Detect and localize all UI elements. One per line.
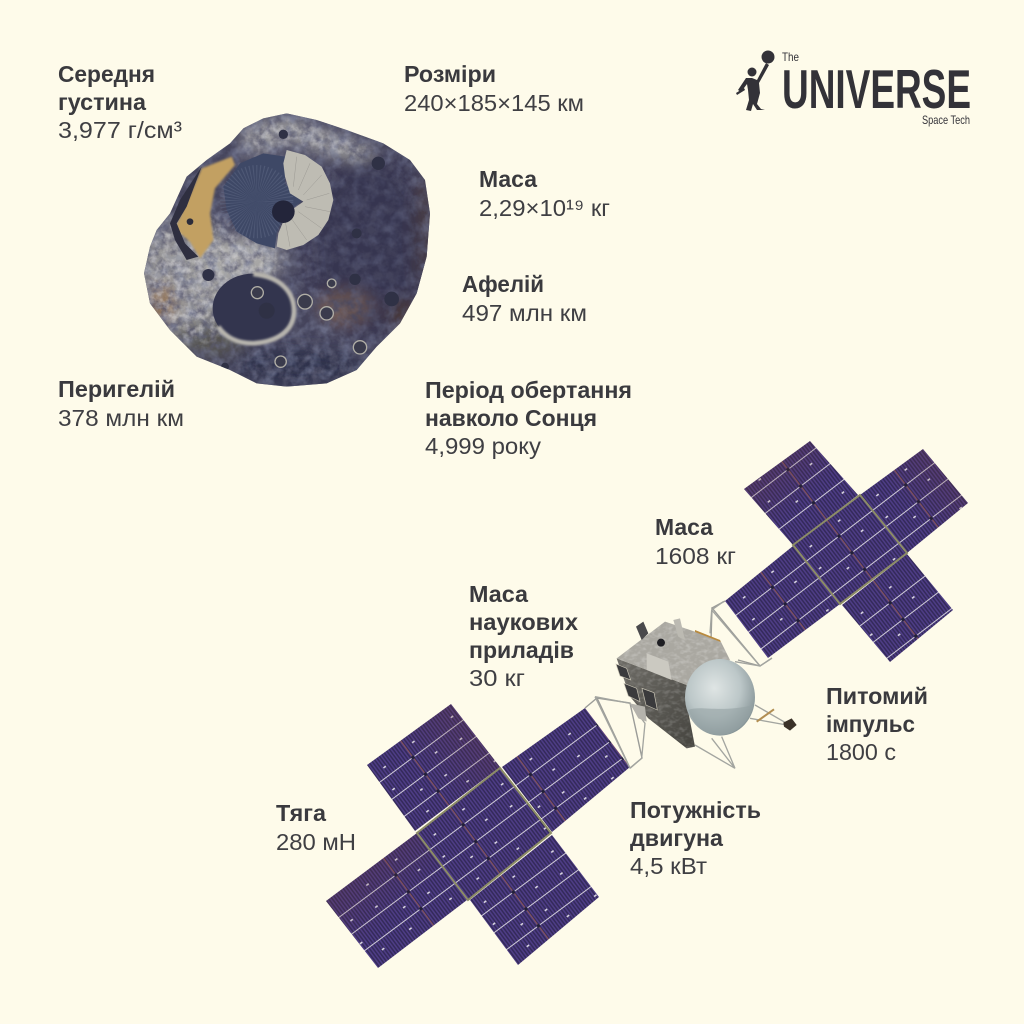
body top	[617, 622, 730, 685]
stat: instrument mass	[469, 581, 578, 691]
struts	[595, 602, 787, 768]
stat: orbital period: 4,999 року	[425, 433, 542, 459]
stat: perihelion	[58, 376, 184, 431]
stat: spacecraft mass: 1608 кг	[655, 543, 736, 569]
support frame	[711, 601, 772, 666]
stat: instrument mass: наукових	[469, 609, 578, 635]
asteroid Psyche illustration	[144, 113, 430, 387]
stat: specific impulse: Питомий	[826, 683, 928, 709]
support frame	[585, 698, 642, 768]
stat: instrument mass: Маса	[469, 581, 528, 607]
stat: specific impulse: 1800 с	[826, 739, 896, 765]
stat: thrust: 280 мН	[276, 829, 356, 855]
stat: engine power: Потужність	[630, 797, 761, 823]
stat: specific impulse: імпульс	[826, 711, 915, 737]
logo: The Universe Space Tech	[736, 50, 971, 127]
stat: thrust: Тяга	[276, 800, 326, 826]
stat: spacecraft mass: Маса	[655, 514, 713, 540]
stat: dimensions: 240×185×145 км	[404, 90, 584, 116]
stat: aphelion: 497 млн км	[462, 300, 587, 326]
stat: orbital period: Період обертання	[425, 377, 632, 403]
stat: dimensions: Розміри	[404, 61, 496, 87]
lower-left solar array	[326, 698, 642, 968]
stat: aphelion: Афелій	[462, 271, 544, 297]
stat: thrust	[276, 800, 356, 855]
tan mineral patch	[177, 157, 235, 258]
stat: orbital period	[425, 377, 632, 459]
louvres	[616, 664, 657, 710]
stat: orbital period: навколо Сонця	[425, 405, 597, 431]
stat: engine power	[630, 797, 761, 879]
small craters	[251, 279, 367, 367]
body side	[617, 658, 695, 748]
stat: density: 3,977 г/см³	[58, 117, 182, 143]
stat: specific impulse	[826, 683, 928, 765]
stat: density: Середня	[58, 61, 155, 87]
stat: density: густина	[58, 89, 146, 115]
stat: instrument mass: 30 кг	[469, 665, 525, 691]
stat: dimensions	[404, 61, 584, 116]
stat: asteroid mass	[479, 166, 610, 221]
crater: rayed, dark half	[223, 153, 302, 248]
stat: aphelion	[462, 271, 587, 326]
tank sphere	[685, 659, 755, 736]
antenna tip	[783, 718, 797, 731]
stat: engine power: двигуна	[630, 825, 723, 851]
instruments	[657, 639, 665, 647]
stat: perihelion: 378 млн км	[58, 405, 184, 431]
logo: The Universe Space Tech: Space Tech	[922, 113, 970, 127]
logo icon: figure holding globe	[736, 50, 774, 111]
lower crater	[213, 274, 293, 343]
logo wordmark: The	[782, 50, 799, 64]
stat: density	[58, 61, 182, 143]
upper-right solar array	[711, 441, 968, 666]
stat: perihelion: Перигелій	[58, 376, 175, 402]
stat: instrument mass: приладів	[469, 637, 574, 663]
darkened right side	[313, 160, 427, 333]
spacecraft bus	[595, 602, 797, 768]
stat: spacecraft mass	[655, 514, 736, 569]
stat: asteroid mass: Маса	[479, 166, 537, 192]
crater: rayed, light half	[277, 150, 333, 250]
stat: asteroid mass: 2,29×10¹⁹ кг	[479, 195, 610, 221]
stat: engine power: 4,5 кВт	[630, 853, 707, 879]
